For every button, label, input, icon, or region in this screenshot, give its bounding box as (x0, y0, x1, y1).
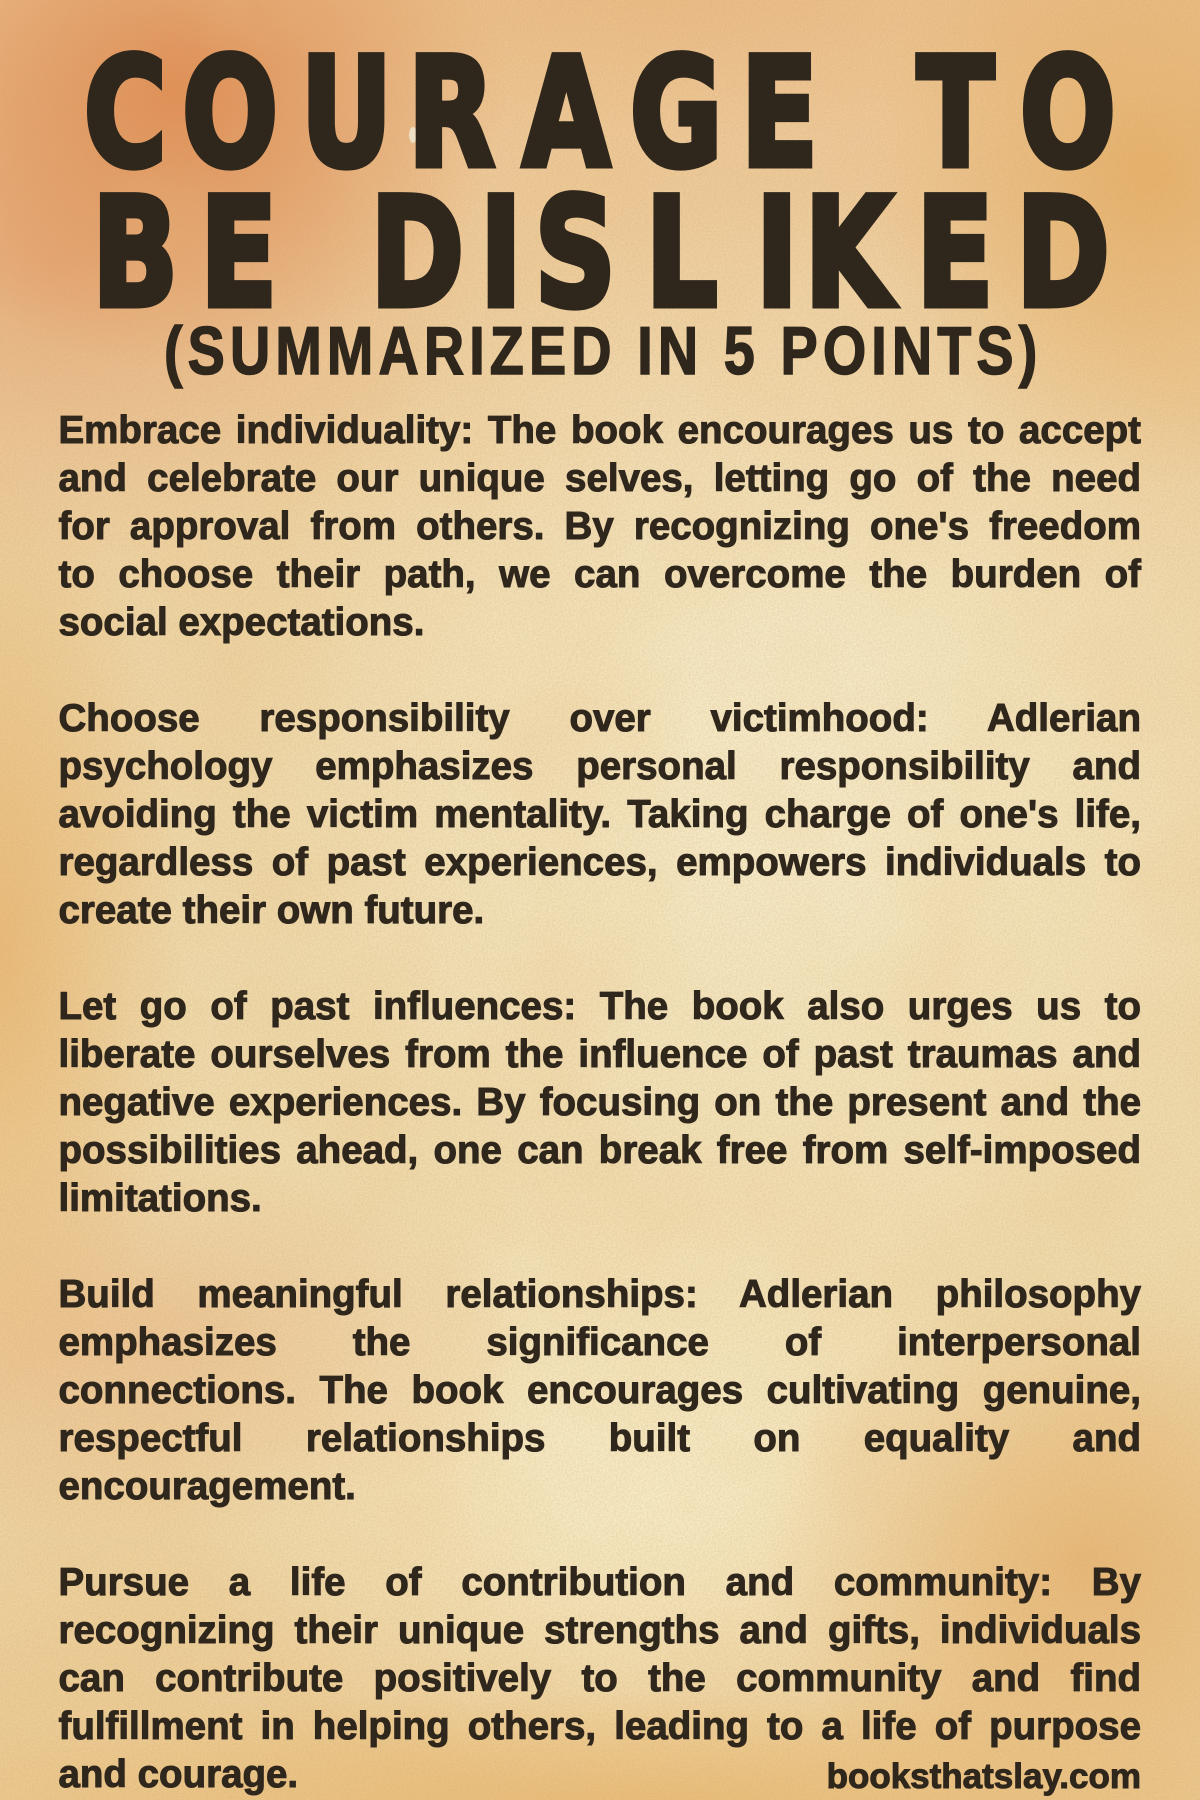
point 4: build meaningful relationships: respectful relationships built on equality and (58, 1417, 1141, 1460)
point 3: let go of past influences: limitations. (58, 1177, 262, 1220)
point 3: let go of past influences: liberate ourselves from the influence of past traumas and (58, 1033, 1141, 1076)
point 1: embrace individuality: social expectations. (58, 601, 424, 644)
body text (58, 409, 1142, 1796)
paper fleck (409, 127, 417, 143)
point 5: pursue contribution and community: can contribute positively to the community and find (58, 1657, 1141, 1700)
point 1: embrace individuality: Embrace individuality: The book encourages us to accept (58, 409, 1141, 452)
point 4: build meaningful relationships: encouragement. (58, 1465, 356, 1508)
point 3: let go of past influences (58, 985, 1141, 1220)
point 5: pursue contribution and community (58, 1561, 1142, 1796)
point 3: let go of past influences: possibilities ahead, one can break free from self-imposed (58, 1129, 1141, 1172)
point 1: embrace individuality (58, 409, 1142, 644)
point 1: embrace individuality: and celebrate our unique selves, letting go of the need (58, 457, 1141, 500)
point 4: build meaningful relationships (58, 1273, 1142, 1508)
title line 1: COURAGE TO (84, 27, 1116, 201)
point 3: let go of past influences: Let go of past influences: The book also urges us to (58, 985, 1141, 1028)
point 4: build meaningful relationships: connections. The book encourages cultivating genuine, (58, 1369, 1141, 1412)
heading block (84, 27, 1116, 389)
website credit: booksthatslay.com (827, 1757, 1141, 1796)
subtitle: (SUMMARIZED IN 5 POINTS) (164, 314, 1037, 389)
point 1: embrace individuality: to choose their path, we can overcome the burden of (58, 553, 1141, 596)
point 5: pursue contribution and community: recognizing their unique strengths and gifts, individuals (58, 1609, 1141, 1652)
point 2: choose responsibility (58, 697, 1141, 932)
point 4: build meaningful relationships: emphasizes the significance of interpersonal (58, 1321, 1141, 1364)
title line 2: BE DISLIKED (92, 167, 1110, 341)
point 2: choose responsibility: psychology emphasizes personal responsibility and (58, 745, 1141, 788)
point 4: build meaningful relationships: Build meaningful relationships: Adlerian philosophy (58, 1273, 1141, 1316)
point 2: choose responsibility: create their own future. (58, 889, 484, 932)
point 5: pursue contribution and community: Pursue a life of contribution and community: By (58, 1561, 1141, 1604)
point 5: pursue contribution and community: fulfillment in helping others, leading to a life of purpose (58, 1705, 1141, 1748)
point 2: choose responsibility: regardless of past experiences, empowers individuals to (58, 841, 1141, 884)
point 3: let go of past influences: negative experiences. By focusing on the present and the (58, 1081, 1141, 1124)
point 2: choose responsibility: Choose responsibility over victimhood: Adlerian (58, 697, 1141, 740)
point 2: choose responsibility: avoiding the victim mentality. Taking charge of one's life, (58, 793, 1141, 836)
point 5: pursue contribution and community: and courage. (58, 1753, 298, 1796)
point 1: embrace individuality: for approval from others. By recognizing one's freedom (58, 505, 1141, 548)
